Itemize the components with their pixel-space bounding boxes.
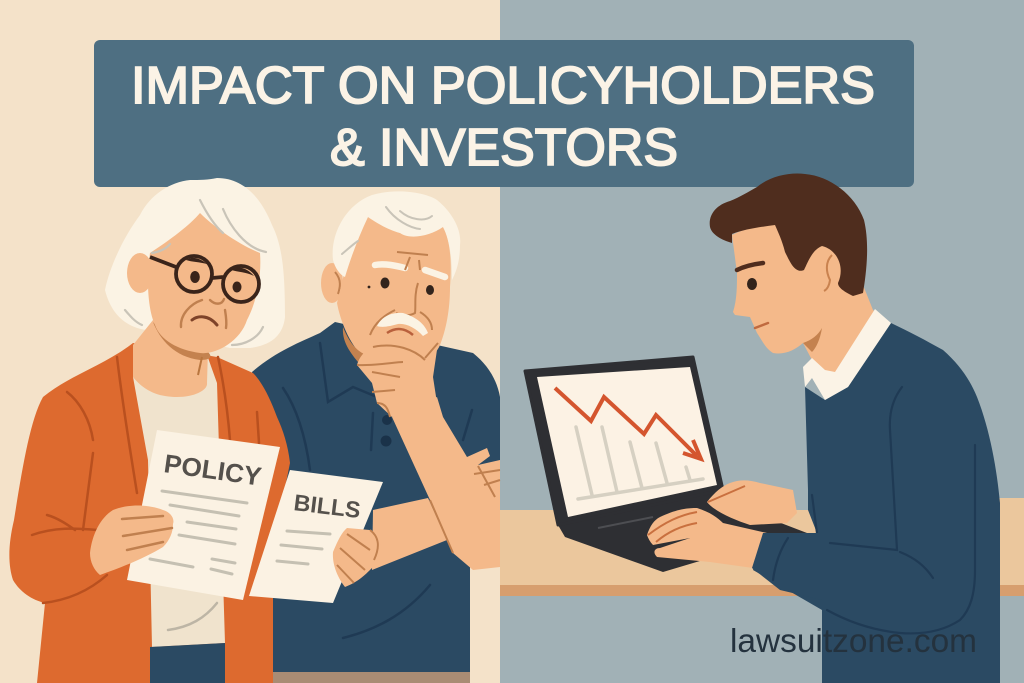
- watermark: lawsuitzone.com: [730, 622, 977, 659]
- title: & INVESTORS: [330, 119, 678, 177]
- investor back hand: [707, 480, 797, 525]
- man head: [321, 191, 460, 363]
- woman cardigan lines: [32, 357, 259, 603]
- investor front hand: [647, 508, 767, 568]
- man mouth: [387, 329, 413, 335]
- paper: policy: POLICY: [162, 448, 263, 492]
- woman trousers: [150, 643, 225, 683]
- woman eyes: [186, 258, 254, 292]
- man raised forearm: [392, 397, 500, 570]
- title: IMPACT ON POLICYHOLDERS: [131, 57, 875, 115]
- woman undershirt: [133, 355, 225, 647]
- laptop base: [558, 490, 807, 572]
- investor ear inner: [824, 255, 832, 291]
- paper: bills: BILLS: [292, 489, 362, 523]
- man trousers: [268, 672, 470, 683]
- woman ear: [127, 253, 153, 293]
- investor neck shadow: [803, 328, 822, 352]
- investor collar: [803, 309, 891, 400]
- investor sweater: [753, 323, 1000, 683]
- desk: [500, 498, 1024, 596]
- paper: policy: [127, 430, 280, 600]
- investor face: [732, 224, 850, 353]
- falling trend arrow: [555, 388, 697, 456]
- man shirt: [252, 322, 500, 672]
- title banner: [94, 40, 914, 187]
- investor hair: [710, 174, 867, 296]
- woman hair: [105, 178, 285, 348]
- man eyes: [368, 278, 434, 295]
- laptop: [525, 357, 807, 572]
- man shirt buttons: [380, 415, 392, 446]
- investor brow: [737, 263, 763, 270]
- elderly woman: [9, 178, 383, 683]
- man hand on chin: [357, 343, 438, 417]
- investor sleeve cuff: [752, 533, 822, 600]
- elderly man: [252, 191, 500, 683]
- title: [131, 57, 875, 177]
- woman cardigan: [9, 343, 290, 683]
- woman hair strands: [125, 200, 266, 345]
- woman face: [148, 213, 260, 353]
- laptop screen: [525, 357, 723, 525]
- investor eye: [747, 278, 757, 290]
- investor: [525, 174, 1000, 683]
- woman glasses: [150, 256, 259, 302]
- woman right hand: [333, 528, 380, 587]
- woman neck shadow: [153, 322, 210, 360]
- investor mouth: [755, 323, 768, 328]
- man moustache: [377, 313, 428, 336]
- investor neck: [803, 285, 885, 395]
- man nose: [370, 283, 432, 335]
- trackpad line: [598, 517, 653, 528]
- chart bars: [576, 427, 703, 499]
- panel: investors background: [500, 0, 1024, 683]
- woman left hand: [90, 505, 173, 575]
- man shirt details: [283, 343, 472, 638]
- man face: [337, 217, 451, 363]
- investor ear: [813, 243, 845, 293]
- paper: bills: [249, 470, 383, 603]
- woman wrinkles and mouth: [181, 299, 226, 328]
- woman neck: [133, 320, 215, 397]
- man hair: [333, 191, 460, 280]
- investor sweater lines: [773, 387, 975, 633]
- man crossing arm: [372, 498, 447, 570]
- man ear: [321, 263, 343, 303]
- man brows: [375, 264, 445, 277]
- man jaw shadow: [343, 327, 372, 362]
- panel: policyholders background: [0, 0, 500, 683]
